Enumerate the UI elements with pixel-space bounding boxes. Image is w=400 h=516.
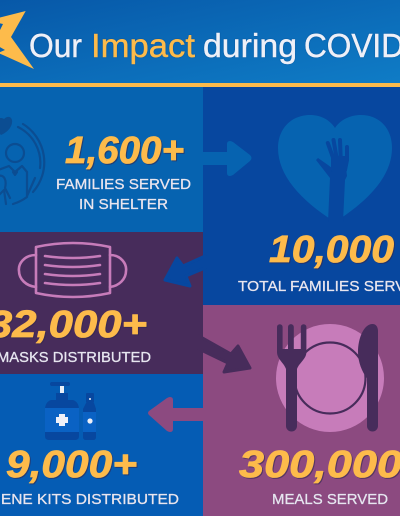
icon: heart with hand — [278, 115, 392, 222]
title — [29, 27, 400, 64]
label: masks distributed: MASKS DISTRIBUTED — [0, 349, 151, 366]
header band — [0, 0, 400, 87]
label: families served in shelter — [56, 176, 191, 213]
panel: total families — [203, 87, 400, 305]
icon: face mask — [19, 243, 126, 297]
arrow: masks to meals — [199, 336, 250, 372]
label: families served in shelter: IN SHELTER — [79, 196, 168, 213]
stat: 10,000: 10,000 — [269, 229, 394, 271]
panel: meals — [203, 305, 400, 516]
panel: families in shelter — [0, 87, 203, 232]
arrow: total to masks — [165, 256, 205, 286]
arrow: shelter to total — [200, 141, 252, 176]
arrow: meals to hygiene — [148, 397, 206, 432]
panel: hygiene kits — [0, 374, 203, 516]
title: Our — [29, 27, 82, 64]
title: during — [203, 27, 297, 64]
panel: masks — [0, 232, 203, 374]
icon: plate and cutlery — [276, 324, 384, 432]
stat: 1,600+: 1,600+ — [65, 130, 184, 172]
label: families served in shelter: FAMILIES SERVED — [56, 176, 191, 193]
title: Impact — [91, 27, 195, 64]
stat: 9,000+: 9,000+ — [6, 444, 137, 486]
icon: star — [0, 11, 34, 69]
label: meals served: MEALS SERVED — [272, 491, 388, 508]
stat: 300,000: 300,000 — [239, 444, 400, 486]
icon: sanitizer bottles — [45, 382, 96, 440]
icon: family in circle — [0, 117, 44, 204]
